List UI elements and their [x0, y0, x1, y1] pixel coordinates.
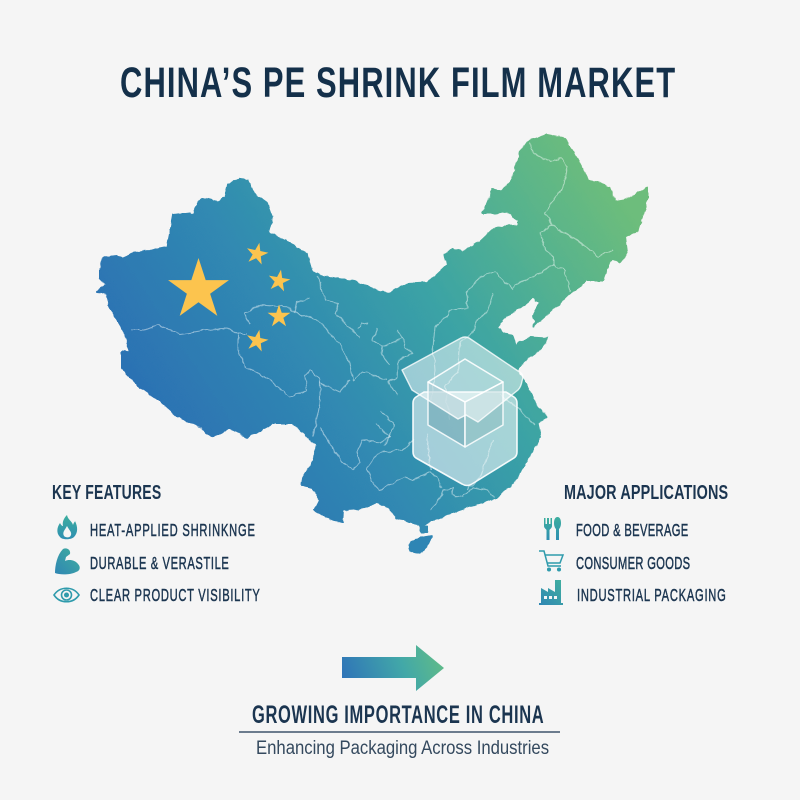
text: food and beverage: FOOD & BEVERAGE: [576, 520, 688, 541]
package: lower box: [413, 392, 517, 486]
package: inner cube: [428, 382, 503, 447]
icon: fork and spoon: [544, 517, 561, 540]
footer subheading: Enhancing Packaging Across Industries: [256, 737, 549, 758]
small yellow star 4: [244, 327, 270, 352]
title: CHINA’S PE SHRINK FILM MARKET: [120, 58, 675, 106]
panel: major applications: [539, 481, 728, 606]
large yellow star: [168, 258, 229, 316]
footer heading: GROWING IMPORTANCE IN CHINA: [252, 702, 544, 729]
small yellow star 3: [268, 304, 290, 326]
package: cube top: [428, 359, 503, 402]
icon: eye: [54, 588, 79, 602]
text: clear visibility: CLEAR PRODUCT VISIBILITY: [90, 585, 260, 606]
text: consumer goods: CONSUMER GOODS: [576, 553, 690, 574]
small yellow star 2: [267, 268, 292, 292]
map: Hainan island: [408, 535, 433, 554]
text: industrial packaging: INDUSTRIAL PACKAGING: [577, 585, 726, 606]
text: durable: DURABLE & VERASTILE: [90, 553, 229, 574]
small yellow star 1: [244, 240, 270, 265]
shrink film package: [402, 337, 523, 486]
arrow: [342, 645, 444, 691]
icon: factory: [539, 580, 563, 605]
icon: shopping cart: [539, 551, 563, 571]
package: lid: [402, 337, 523, 422]
icon: flame: [57, 515, 77, 539]
map of China: [97, 135, 647, 554]
panel: key features: [52, 480, 260, 606]
icon: flexed arm: [55, 548, 80, 574]
heading: key features: KEY FEATURES: [52, 480, 161, 504]
heading: major applications: MAJOR APPLICATIONS: [564, 481, 728, 504]
map: province borders: [132, 143, 613, 510]
text: heat-applied: HEAT-APPLIED SHRINKNGE: [90, 520, 255, 541]
map: mainland shape: [97, 135, 647, 532]
